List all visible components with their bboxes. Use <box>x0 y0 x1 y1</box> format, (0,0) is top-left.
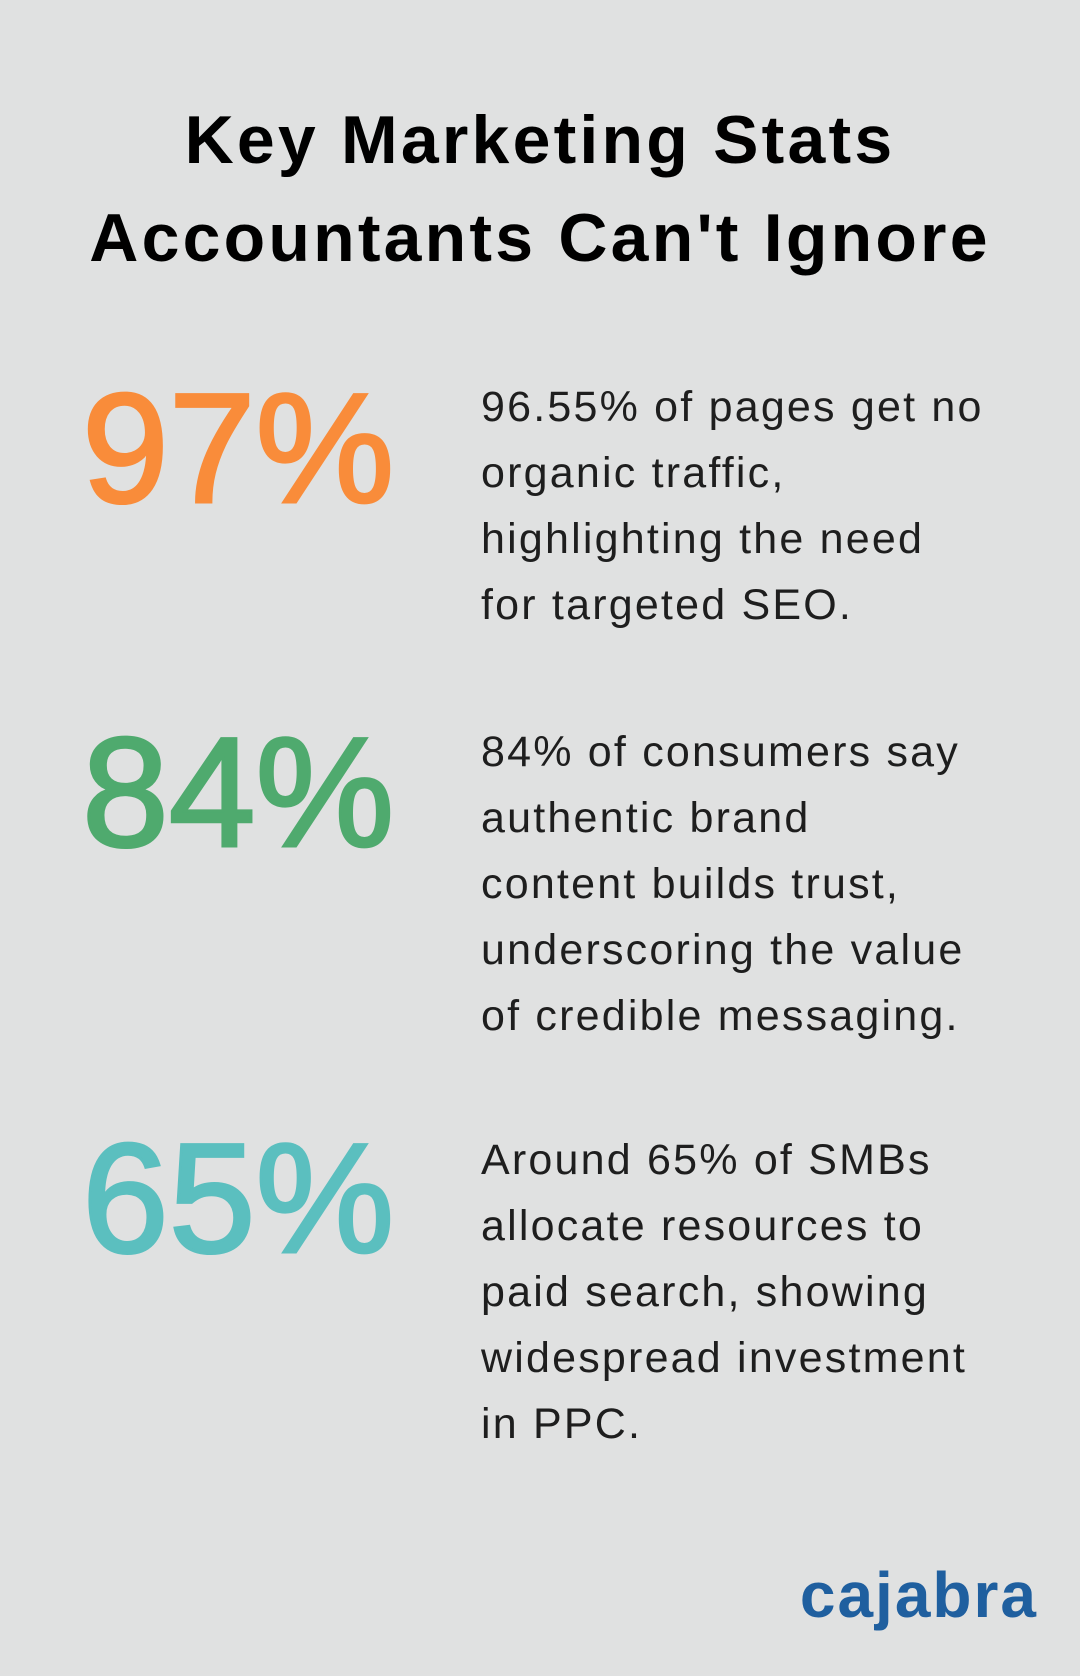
stat 1 text: 96.55% of pages get no <box>481 383 984 431</box>
title: Accountants Can't Ignore <box>89 200 991 276</box>
stat 3 text: widespread investment <box>481 1334 967 1382</box>
stat 3 text <box>481 1136 967 1448</box>
stat 3 number: 65% <box>82 1112 394 1286</box>
stat 3 text: allocate resources to <box>481 1202 924 1250</box>
stat 2 text: authentic brand <box>481 794 810 842</box>
title: Key Marketing Stats <box>185 102 895 178</box>
stat 1 text: highlighting the need <box>481 515 924 563</box>
stat 1 text: organic traffic, <box>481 449 785 497</box>
stat 2 text: underscoring the value <box>481 926 964 974</box>
stat 2 text: 84% of consumers say <box>481 728 960 776</box>
stat 2 number: 84% <box>82 706 394 880</box>
title <box>89 102 991 276</box>
stat 3 text: in PPC. <box>481 1400 642 1448</box>
stat 2 text <box>481 728 964 1040</box>
stat 2 text: of credible messaging. <box>481 992 960 1040</box>
logo: cajabra <box>800 1559 1038 1631</box>
stat 2 text: content builds trust, <box>481 860 900 908</box>
stat 1 number: 97% <box>82 362 394 536</box>
stat 1 text <box>481 383 984 629</box>
stat 3 text: Around 65% of SMBs <box>481 1136 932 1184</box>
stat 3 text: paid search, showing <box>481 1268 929 1316</box>
stat 1 text: for targeted SEO. <box>481 581 853 629</box>
